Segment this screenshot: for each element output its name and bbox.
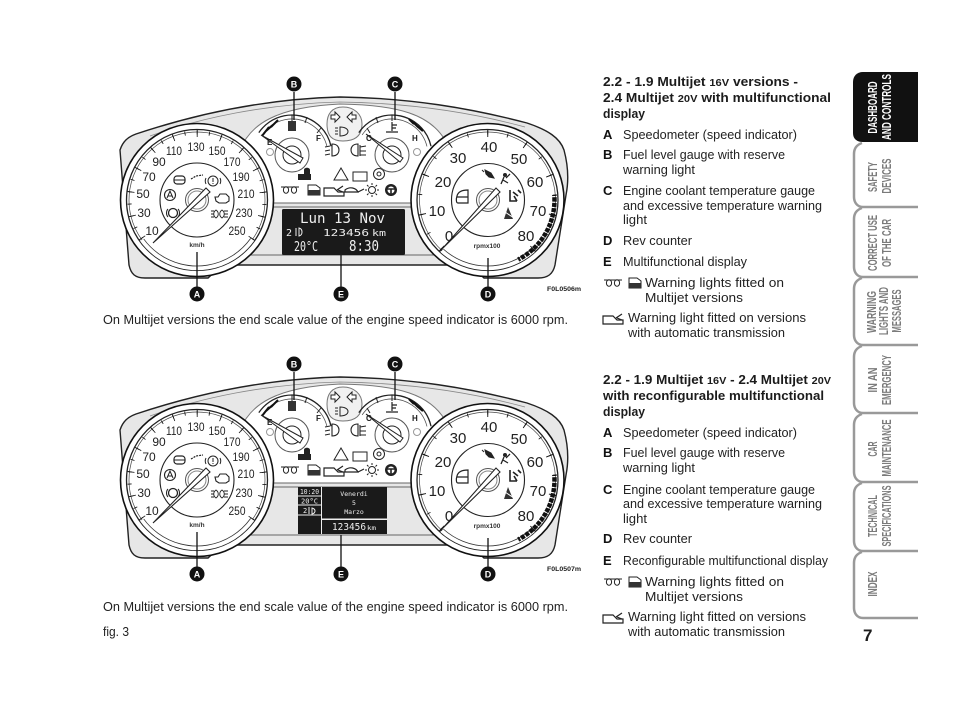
gauge end letters [267,414,418,427]
speedometer scale: 190 [232,170,250,184]
callout letters [194,360,492,580]
text block: reconfigurable display legend: and excessive temperature warning [623,497,822,511]
rev counter scale: 70 [530,483,546,500]
rev counter scale: 10 [429,203,445,220]
tab: car maintenance: MAINTENANCE [879,419,894,476]
tab: car maintenance [854,414,918,482]
multifunctional display screen: km [372,229,386,239]
page number: 7 [863,626,872,645]
tab: correct use of the car: OF THE CAR [879,219,894,267]
tab: correct use of the car: CORRECT USE [865,215,880,271]
rev counter scale: 80 [518,508,534,525]
text block: reconfigurable display legend: Rev counter [623,532,692,546]
figure code: F0L0507m [547,566,581,573]
tab: safety devices: SAFETY [865,162,880,192]
figure label: fig. 3 [103,625,129,639]
text block: multifunctional display legend: Warning light fitted on versions [628,311,806,325]
multifunctional display screen [282,209,405,255]
callout letters: A [194,570,201,580]
speedometer scale: 210 [238,467,255,481]
figure code: F0L0506m [547,286,581,293]
speedometer scale [136,140,255,249]
tab: dashboard and controls (active): AND CONTROLS [879,74,894,140]
tab: in an emergency [854,346,918,413]
text block: reconfigurable display legend: Reconfigurable multifunctional display [623,554,829,568]
rev counter scale: 40 [481,139,497,156]
rev counter scale: 70 [530,203,546,220]
caption: first cluster note: On Multijet versions the end scale value of the engine speed indicator is 6000 rpm. [103,313,568,327]
rev counter scale: 30 [450,430,466,447]
speedometer scale: 30 [137,486,151,500]
speedometer scale: 170 [224,435,241,449]
tab: warning lights and messages: MESSAGES [889,289,904,332]
rev counter scale: 20 [435,454,451,471]
gauge end letters: H [412,134,418,143]
tab: safety devices: DEVICES [879,158,894,194]
reconfigurable display screen: km [367,525,376,532]
callout letters: E [338,570,344,580]
instrument cluster: multifunctional display [102,76,584,302]
speedometer scale: 210 [238,187,255,201]
rev counter scale: 0 [445,228,453,245]
text block: reconfigurable display legend: Fuel level gauge with reserve [623,446,785,460]
speedometer scale: 50 [136,467,150,481]
rev counter scale: 50 [511,151,527,168]
multifunctional display screen: 20°C [294,240,318,255]
gauge end letters: F [316,414,321,423]
text block: multifunctional display legend: with automatic transmission [627,326,785,340]
text block: reconfigurable display legend: B [603,445,612,460]
speedometer scale: 50 [136,187,150,201]
speedometer scale: 170 [224,155,241,169]
speedometer scale: 30 [137,206,151,220]
speedometer scale: 110 [166,424,182,438]
reconfigurable display screen: 20°C [301,498,318,506]
speedometer scale: 230 [236,206,253,220]
caption: second cluster note: On Multijet versions the end scale value of the engine speed indicator is 6000 rpm. [103,600,568,614]
speedometer scale: 230 [236,486,253,500]
text block: reconfigurable display legend: Warning light fitted on versions [628,610,806,624]
callout letters: D [485,570,492,580]
text block: reconfigurable display legend: A [603,425,613,440]
speedometer scale: 250 [228,504,246,518]
text block: reconfigurable display legend [602,372,831,639]
navigation tabs [853,72,918,618]
text block: multifunctional display legend: Rev counter [623,234,692,248]
text block: multifunctional display legend: D [603,233,612,248]
tab: warning lights and messages [854,278,918,345]
text block: multifunctional display legend: 2.2 - 1.9 Multijet 16V versions - [603,74,798,89]
rev counter scale [429,139,546,250]
callout letters: E [338,290,344,300]
text block: reconfigurable display legend: Engine coolant temperature gauge [623,483,815,497]
callout letters: C [392,360,399,370]
gauge end letters: F [316,134,321,143]
tab: safety devices [854,143,918,207]
text block: reconfigurable display legend: C [603,482,613,497]
text block: reconfigurable display legend: warning light [622,461,696,475]
rev counter scale: 60 [527,454,543,471]
text block: reconfigurable display legend: Warning lights fitted on [645,575,784,589]
speedometer scale: 70 [142,450,156,464]
speedometer scale: 110 [166,144,182,158]
tab: dashboard and controls (active) [853,72,918,142]
speedometer scale [136,420,255,529]
speedometer scale: 10 [145,224,159,238]
speedometer scale: 90 [152,435,166,449]
speedometer scale: 130 [188,420,205,434]
text block: multifunctional display legend: Warning lights fitted on [645,276,784,290]
callout letters: B [291,360,298,370]
speedometer scale: 250 [228,224,246,238]
instrument cluster: reconfigurable display [102,356,584,582]
reconfigurable display screen: Venerdi [340,490,368,498]
reconfigurable display screen: 123456 [332,522,366,533]
tab: in an emergency: EMERGENCY [879,355,894,405]
speedometer scale: km/h [189,522,205,529]
text block: reconfigurable display legend: light [623,512,648,526]
text block: multifunctional display legend: Multifunctional display [623,255,748,269]
text block: reconfigurable display legend: with automatic transmission [627,625,785,639]
text block: multifunctional display legend: B [603,147,612,162]
speedometer scale: 190 [232,450,250,464]
tab: index: INDEX [865,571,880,596]
rev counter scale: rpmx100 [474,523,501,530]
multifunctional display screen: 123456 [323,228,369,239]
multifunctional display screen: 8:30 [349,237,379,255]
text block: multifunctional display legend: warning light [622,163,696,177]
text block: multifunctional display legend: display [603,106,646,121]
text block: multifunctional display legend: Speedometer (speed indicator) [623,128,797,142]
rev counter scale: 20 [435,174,451,191]
text block: multifunctional display legend [603,74,831,340]
callout letters: A [194,290,201,300]
text block: reconfigurable display legend: Speedometer (speed indicator) [623,426,797,440]
gauge end letters [267,134,418,147]
callout letters [194,80,492,300]
text block: multifunctional display legend: Multijet versions [645,291,743,305]
text block: multifunctional display legend: A [603,127,613,142]
tab: in an emergency: IN AN [865,368,880,392]
tab: correct use of the car [854,208,918,277]
reconfigurable display screen [298,487,387,534]
speedometer scale: 70 [142,170,156,184]
rev counter scale: 60 [527,174,543,191]
tab: warning lights and messages: LIGHTS AND [876,287,891,335]
text block: multifunctional display legend: E [603,254,612,269]
text block: reconfigurable display legend: display [603,404,646,419]
rev counter scale [429,419,546,530]
rev counter scale: 50 [511,431,527,448]
text block: multifunctional display legend: 2.4 Multijet 20V with multifunctional [603,90,831,105]
gauge end letters: E [267,138,273,147]
gauge end letters: C [366,414,372,423]
tab: index [854,552,918,618]
text block: multifunctional display legend: Fuel level gauge with reserve [623,148,785,162]
gauge end letters: E [267,418,273,427]
rev counter scale: rpmx100 [474,243,501,250]
tab: technical specifications [854,483,918,551]
reconfigurable display screen: Marzo [344,508,364,516]
text block: reconfigurable display legend: Multijet versions [645,590,743,604]
speedometer scale: km/h [189,242,205,249]
text block: multifunctional display legend: C [603,183,613,198]
rev counter scale: 40 [481,419,497,436]
callout letters: B [291,80,298,90]
rev counter scale: 0 [445,508,453,525]
callout letters: C [392,80,399,90]
tab: dashboard and controls (active): DASHBOARD [865,81,880,134]
tab: technical specifications: TECHNICAL [865,495,880,537]
text block: multifunctional display legend: Engine coolant temperature gauge [623,184,815,198]
tab: technical specifications: SPECIFICATIONS [879,485,894,546]
text block: reconfigurable display legend: with reconfigurable multifunctional [602,388,824,403]
gauge end letters: H [412,414,418,423]
text block: multifunctional display legend: light [623,213,648,227]
speedometer scale: 150 [208,144,226,158]
tab: warning lights and messages: WARNING [864,291,879,333]
multifunctional display screen: 2 [286,228,292,239]
tab: car maintenance: CAR [865,441,880,456]
rev counter scale: 10 [429,483,445,500]
speedometer scale: 150 [208,424,226,438]
speedometer scale: 90 [152,155,166,169]
rev counter scale: 80 [518,228,534,245]
reconfigurable display screen: 10:20 [300,488,319,496]
gauge end letters: C [366,134,372,143]
text block: multifunctional display legend: and excessive temperature warning [623,199,822,213]
text block: reconfigurable display legend: E [603,553,612,568]
multifunctional display screen: Lun 13 Nov [300,211,385,227]
speedometer scale: 10 [145,504,159,518]
reconfigurable display screen: 5 [352,499,356,507]
reconfigurable display screen: 2 [303,507,307,515]
callout letters: D [485,290,492,300]
rev counter scale: 30 [450,150,466,167]
speedometer scale: 130 [188,140,205,154]
text block: reconfigurable display legend: 2.2 - 1.9 Multijet 16V - 2.4 Multijet 20V [603,372,831,387]
text block: reconfigurable display legend: D [603,531,612,546]
